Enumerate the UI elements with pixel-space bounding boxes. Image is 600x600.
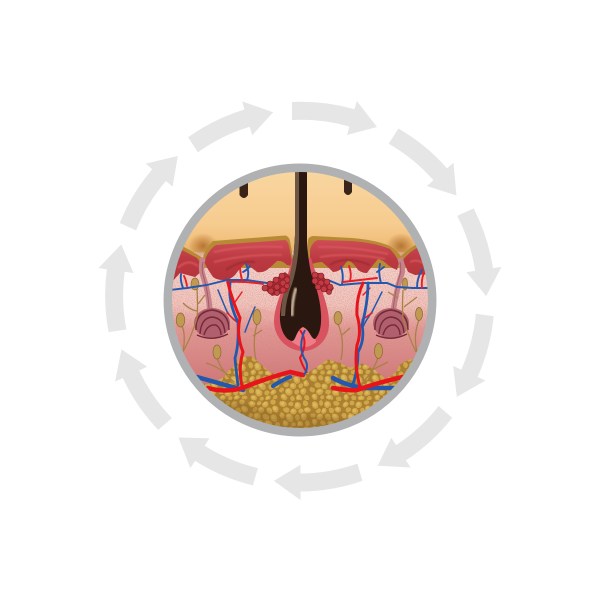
right sweat gland — [373, 258, 409, 338]
arrow 5 — [372, 396, 453, 483]
small hair left — [240, 183, 248, 198]
arrow 3 — [444, 208, 510, 299]
cycle arrows ring — [96, 90, 510, 506]
arrow 4 — [449, 312, 495, 401]
hair follicle sheath — [274, 258, 329, 351]
sebaceous gland right — [312, 272, 334, 294]
arrow 8 — [102, 344, 183, 431]
epidermis surface — [184, 172, 416, 252]
golden skin edge — [182, 236, 417, 268]
central left red dermal layer — [204, 240, 293, 280]
arrow 9 — [96, 243, 141, 332]
arrow 10 — [119, 145, 185, 237]
muscle striations — [178, 247, 425, 270]
arrector muscle band — [248, 305, 274, 320]
sebaceous gland left — [262, 272, 290, 296]
lower and vertical blue vessels — [197, 283, 393, 390]
sensory bulbs — [176, 278, 422, 359]
arrow 2 — [381, 128, 470, 202]
arrow 11 — [188, 90, 277, 165]
hair shaft and root bulb — [280, 170, 321, 341]
dermis tissue — [172, 252, 428, 384]
fat tissue — [202, 356, 413, 428]
dermal papilla — [292, 327, 316, 375]
arrow 6 — [272, 449, 363, 506]
left sweat gland — [194, 258, 230, 338]
nerve endings — [182, 288, 419, 388]
skin cross-section illustration — [172, 172, 428, 428]
small hair right — [344, 180, 352, 195]
lower and vertical red vessels — [208, 283, 403, 390]
grey circle border — [168, 168, 432, 432]
arrow 1 — [292, 101, 377, 135]
right red dermal fold — [403, 248, 426, 275]
infographic — [98, 101, 502, 500]
upper blood vessels — [170, 264, 430, 332]
epidermis fold shadows — [190, 234, 414, 258]
arrow 7 — [171, 430, 262, 486]
central right red dermal layer — [310, 240, 399, 273]
left red dermal fold — [174, 250, 200, 280]
